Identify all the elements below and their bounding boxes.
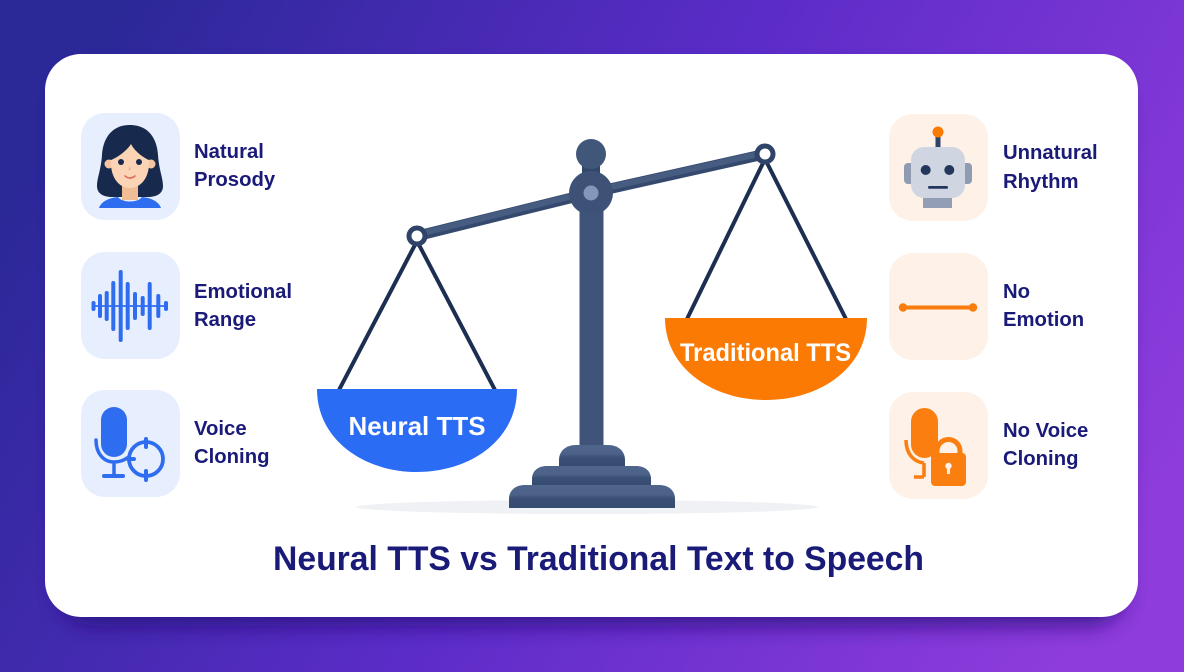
label: Voice Cloning: Voice (194, 418, 247, 440)
icon: robot (889, 114, 988, 221)
pillar (580, 200, 604, 448)
left pan strings (339, 241, 495, 390)
label: No Emotion: No (1003, 281, 1030, 303)
icon: microphone with clone ring (81, 390, 180, 497)
left pan: Neural TTS: Neural TTS (348, 411, 486, 441)
label: Voice Cloning: Cloning (194, 446, 269, 468)
right pivot ring (757, 146, 773, 162)
left pan: Neural TTS (317, 389, 517, 472)
label: Unnatural Rhythm: Unnatural (1003, 142, 1098, 164)
label: No Voice Cloning: No Voice (1003, 420, 1088, 442)
right pan strings (687, 159, 846, 319)
icon: microphone with padlock (889, 392, 988, 499)
item: no emotion (889, 253, 1084, 360)
item: emotional range (81, 252, 292, 359)
label: Emotional Range: Emotional (194, 281, 292, 303)
central hub (569, 171, 613, 215)
label: Unnatural Rhythm: Rhythm (1003, 171, 1078, 193)
item: no voice cloning (889, 392, 1088, 499)
item: unnatural rhythm (889, 114, 1098, 221)
ground shadow (356, 500, 818, 514)
icon: waveform (81, 252, 180, 359)
right pan: Traditional TTS (665, 318, 867, 400)
left pivot ring (409, 228, 425, 244)
right pan: Traditional TTS: Traditional TTS (680, 339, 851, 367)
panel: neural TTS benefits (81, 113, 292, 497)
label: Emotional Range: Range (194, 309, 256, 331)
chart: balance scale (317, 139, 867, 514)
item: natural prosody (81, 113, 276, 220)
label: No Voice Cloning: Cloning (1003, 448, 1078, 470)
beam (417, 152, 765, 236)
top finial (582, 160, 600, 180)
card shadow (58, 70, 1126, 626)
item: voice cloning (81, 390, 269, 497)
label: Natural Prosody: Natural (194, 141, 264, 163)
base steps (509, 445, 675, 508)
panel: traditional TTS limitations (889, 114, 1098, 499)
title: Neural TTS vs Traditional Text to Speech (273, 540, 924, 578)
icon: woman avatar (81, 113, 180, 220)
icon: flat line (889, 253, 988, 360)
label: Natural Prosody: Prosody (194, 169, 276, 191)
label: No Emotion: Emotion (1003, 309, 1084, 331)
panel: white card (45, 54, 1138, 617)
